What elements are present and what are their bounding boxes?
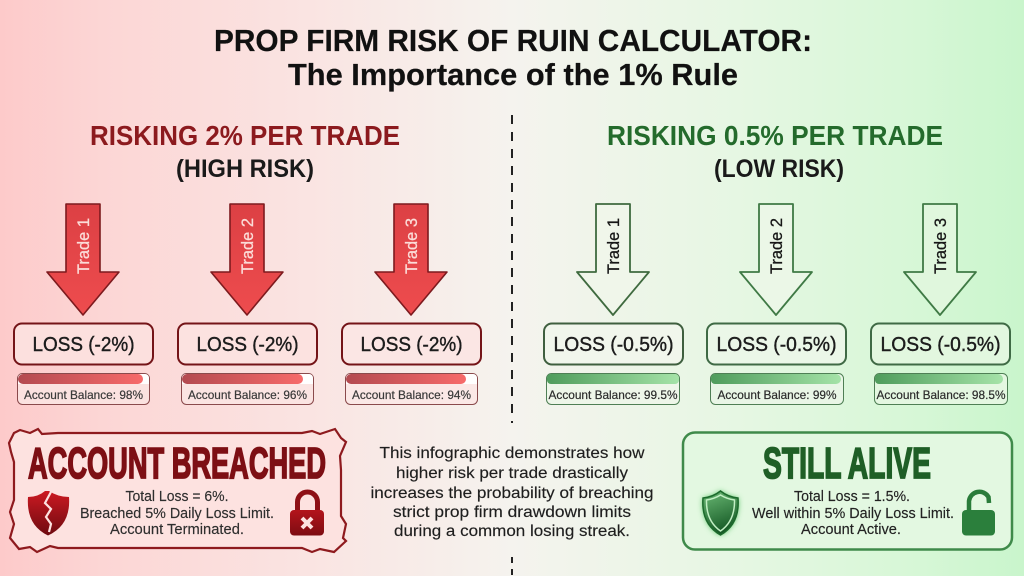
explanatory text: increases the probability of breaching: [370, 485, 654, 502]
balance bar 1: [18, 374, 150, 404]
center dashed divider, lower: [511, 557, 513, 576]
arrow: trade 3: Trade 3: [402, 218, 421, 274]
panel: low risk: [544, 120, 1012, 550]
breach details: [80, 488, 274, 538]
breach details: Account Terminated.: [110, 521, 244, 538]
title: The Importance of the 1% Rule: [288, 57, 738, 92]
icon: open padlock: [962, 492, 995, 536]
balance bar 1: Account Balance: 98%: [24, 388, 143, 402]
loss box 1: LOSS (-0.5%): [554, 334, 674, 356]
arrow: trade 3: Trade 3: [931, 218, 950, 274]
explanatory text: strict prop firm drawdown limits: [393, 504, 631, 521]
center dashed divider, upper: [511, 115, 513, 423]
loss box 2: LOSS (-0.5%): [716, 334, 836, 356]
balance bar 2: [182, 374, 314, 404]
balance bar 3: Account Balance: 94%: [352, 388, 471, 402]
balance bar 2: [710, 374, 844, 404]
arrow: trade 1: [47, 204, 119, 315]
arrow: trade 2: Trade 2: [767, 218, 786, 274]
loss box 2: [178, 324, 317, 364]
balance bar 1: [546, 374, 680, 404]
heading: risking 0.5%: RISKING 0.5% PER TRADE: [607, 120, 943, 151]
loss box 3: LOSS (-2%): [360, 334, 462, 356]
icon: locked padlock: [290, 492, 324, 536]
arrow: trade 1: Trade 1: [604, 218, 623, 274]
loss box 1: [544, 324, 683, 364]
breach details: Breached 5% Daily Loss Limit.: [80, 505, 274, 522]
status details: Account Active.: [801, 521, 901, 538]
balance bar 3: Account Balance: 98.5%: [876, 388, 1006, 402]
arrow: trade 3: [904, 204, 976, 315]
explanatory text: This infographic demonstrates how: [380, 445, 645, 462]
loss box 1: [14, 324, 153, 364]
loss box 3: LOSS (-0.5%): [880, 334, 1000, 356]
title: PROP FIRM RISK OF RUIN CALCULATOR:: [214, 23, 812, 58]
status details: [752, 488, 954, 538]
loss box 1: LOSS (-2%): [32, 334, 134, 356]
icon: shield: [703, 491, 738, 535]
title: [214, 23, 812, 92]
explanatory text: [370, 445, 654, 540]
panel: account breached: [9, 429, 346, 552]
loss box 3: [871, 324, 1010, 364]
arrow: trade 2: Trade 2: [238, 218, 257, 274]
headline: STILL ALIVE: [763, 439, 931, 488]
status details: Well within 5% Daily Loss Limit.: [752, 505, 954, 522]
arrow: trade 1: [577, 204, 649, 315]
subheading: low risk: (LOW RISK): [714, 155, 844, 183]
status details: Total Loss = 1.5%.: [794, 488, 910, 505]
balance bar 2: Account Balance: 96%: [188, 388, 307, 402]
breach details: Total Loss = 6%.: [126, 488, 228, 505]
loss box 2: LOSS (-2%): [196, 334, 298, 356]
loss box 2: [707, 324, 846, 364]
arrow: trade 3: [375, 204, 447, 315]
heading: risking 2%: RISKING 2% PER TRADE: [90, 120, 400, 151]
loss box 3: [342, 324, 481, 364]
arrow: trade 2: [740, 204, 812, 315]
headline: ACCOUNT BREACHED: [28, 439, 326, 488]
balance bar 3: [874, 374, 1008, 404]
card outline: [683, 432, 1012, 550]
balance bar 1: Account Balance: 99.5%: [548, 388, 678, 402]
explanatory text: higher risk per trade drastically: [396, 465, 628, 482]
balance bar 3: [346, 374, 478, 404]
subheading: high risk: (HIGH RISK): [176, 155, 314, 183]
explanatory text: during a common losing streak.: [394, 523, 630, 540]
panel: high risk: [9, 120, 1012, 552]
torn border: [9, 429, 346, 552]
balance bar 2: Account Balance: 99%: [718, 388, 837, 402]
arrow: trade 2: [211, 204, 283, 315]
icon: broken shield: [28, 490, 69, 536]
arrow: trade 1: Trade 1: [74, 218, 93, 274]
panel: still alive: [683, 432, 1012, 550]
